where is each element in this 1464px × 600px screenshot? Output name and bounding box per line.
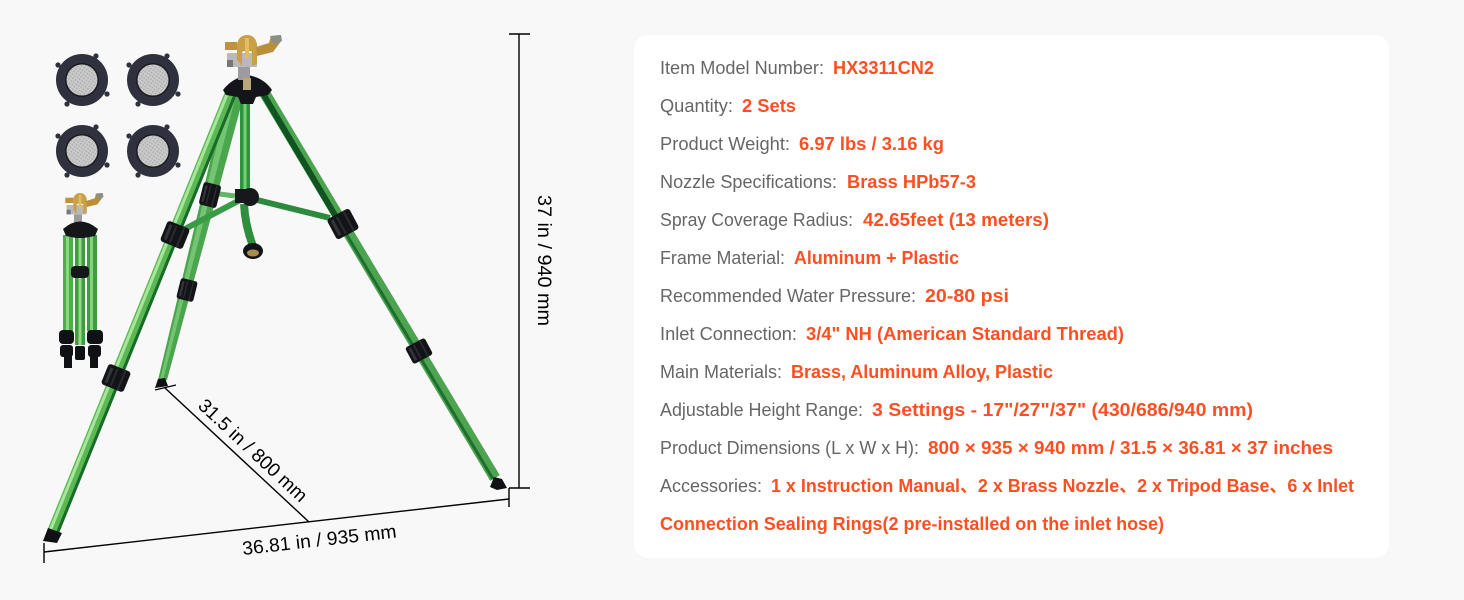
clamps bbox=[101, 182, 433, 393]
spec: spray coverage radius: 42.65feet (13 meters) bbox=[863, 210, 1049, 230]
spec: main materials: Main Materials: bbox=[660, 362, 782, 382]
dimension: length bbox=[155, 385, 311, 522]
spec: product dimensions: Product Dimensions (L x W x H): bbox=[660, 438, 919, 458]
spec: accessories bbox=[660, 476, 1354, 534]
spec: product dimensions bbox=[660, 438, 1333, 458]
panel background bbox=[634, 35, 1389, 558]
panel: specifications bbox=[634, 35, 1389, 558]
icon: main tripod sprinkler bbox=[43, 35, 507, 543]
front left leg bbox=[50, 92, 235, 534]
spec: quantity bbox=[660, 96, 796, 116]
spec: nozzle specifications bbox=[660, 172, 976, 192]
dimension: width: 36.81 in / 935 mm bbox=[241, 522, 398, 560]
spec: inlet connection bbox=[660, 324, 1124, 344]
spec: item model number: Item Model Number: bbox=[660, 58, 824, 78]
spec: frame material: Frame Material: bbox=[660, 248, 785, 268]
spec: product weight: Product Weight: bbox=[660, 134, 790, 154]
spec: item model number bbox=[660, 58, 934, 78]
spec: frame material: Aluminum + Plastic bbox=[794, 248, 959, 268]
spec: product weight: 6.97 lbs / 3.16 kg bbox=[799, 134, 944, 154]
spec: spray coverage radius: Spray Coverage Radius: bbox=[660, 210, 853, 230]
spec: quantity: Quantity: bbox=[660, 96, 733, 116]
spec: inlet connection: 3/4" NH (American Standard Thread) bbox=[806, 324, 1124, 344]
hub bbox=[223, 75, 272, 104]
spec: product dimensions: 800 × 935 × 940 mm / 31.5 × 36.81 × 37 inches bbox=[928, 438, 1333, 458]
sprinkler head bbox=[225, 35, 282, 90]
spec: adjustable height range bbox=[660, 400, 1253, 420]
spec: accessories: 1 x Instruction Manual、2 x Brass Nozzle、2 x Tripod Base、6 x Inlet bbox=[771, 476, 1354, 496]
spec: main materials bbox=[660, 362, 1053, 382]
spec: product weight bbox=[660, 134, 944, 154]
back leg bbox=[158, 95, 244, 380]
spec: frame material bbox=[660, 248, 959, 268]
spec: accessories: Accessories: bbox=[660, 476, 762, 496]
spec: main materials: Brass, Aluminum Alloy, Plastic bbox=[791, 362, 1053, 382]
dimension: width bbox=[44, 488, 509, 563]
spec: nozzle specifications: Nozzle Specifications: bbox=[660, 172, 837, 192]
center column bbox=[240, 96, 250, 197]
spec: inlet connection: Inlet Connection: bbox=[660, 324, 797, 344]
dimension: height: 37 in / 940 mm bbox=[533, 195, 554, 326]
spec: quantity: 2 Sets bbox=[742, 96, 796, 116]
icon: folded tripod bbox=[59, 193, 103, 368]
icon: sealing washers bbox=[55, 53, 181, 178]
dimension: length: 31.5 in / 800 mm bbox=[194, 395, 311, 507]
braces bbox=[183, 193, 330, 246]
spec: nozzle specifications: Brass HPb57-3 bbox=[847, 172, 976, 192]
spec: item model number: HX3311CN2 bbox=[833, 58, 934, 78]
spec: adjustable height range: 3 Settings - 17"/27"/37" (430/686/940 mm) bbox=[872, 400, 1253, 420]
spec: adjustable height range: Adjustable Height Range: bbox=[660, 400, 863, 420]
spec: recommended water pressure: Recommended Water Pressure: bbox=[660, 286, 916, 306]
spec: spray coverage radius bbox=[660, 210, 1049, 230]
right leg bbox=[262, 92, 495, 479]
spec: recommended water pressure: 20-80 psi bbox=[925, 286, 1009, 306]
feet bbox=[43, 378, 507, 543]
spec: accessories: Connection Sealing Rings(2 pre-installed on the inlet hose) bbox=[660, 514, 1164, 534]
